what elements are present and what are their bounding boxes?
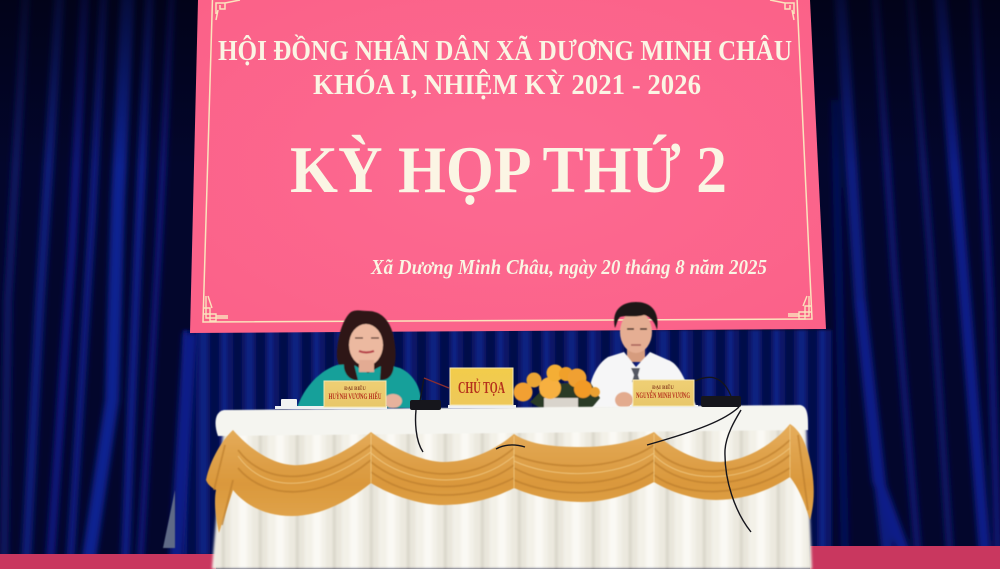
lower backdrop curtain band: [183, 330, 833, 555]
face: [620, 311, 652, 353]
shirt: [587, 352, 697, 408]
nameplate: Nguyen Minh Vuong: ĐẠI BIỂU: [652, 385, 674, 391]
nameplate: chairperson: CHỦ TỌA: [458, 378, 505, 397]
corner ornament: top right: [770, 0, 794, 20]
table top: [216, 405, 808, 436]
corner ornament: bottom left: [203, 296, 228, 321]
corner ornament: bottom right: [788, 296, 812, 319]
delegate: man in white shirt: [587, 302, 697, 408]
delegate: woman in teal: [297, 310, 421, 408]
nameplate: Nguyen Minh Vuong: [633, 380, 694, 406]
left curtain folds: [4, 0, 190, 565]
projection screen: [190, 0, 826, 333]
screen border: [203, 0, 812, 322]
nameplate: chairperson: [450, 368, 513, 405]
floor carpet: [0, 546, 1000, 569]
face: [349, 324, 383, 366]
left microphone base: [410, 400, 441, 410]
heading line 2: KHÓA I, NHIỆM KỲ 2021 - 2026: [313, 68, 701, 101]
hands: [384, 394, 402, 408]
table skirt with pleats: [212, 405, 812, 569]
swag folds: [214, 435, 808, 525]
nameplate: Huynh Vuong Hieu: ĐẠI BIỂU: [344, 386, 366, 392]
right curtain folds: [835, 0, 998, 555]
nameplate: Huynh Vuong Hieu: HUỲNH VƯƠNG HIẾU: [328, 391, 382, 401]
papers on table: [275, 405, 698, 409]
neck: [627, 348, 645, 362]
corner ornament: top left: [216, 0, 240, 20]
table cables: [416, 410, 423, 452]
nameplate: Nguyen Minh Vuong: NGUYỄN MINH VƯƠNG: [636, 390, 690, 400]
hair over blouse: [344, 358, 394, 380]
orange swag drape: [206, 424, 814, 533]
right microphone base: [701, 396, 741, 407]
microphones and cables: [410, 377, 751, 532]
flower arrangement: [514, 364, 600, 432]
hair: [337, 310, 396, 381]
tie: [631, 368, 640, 382]
orange blooms: [514, 364, 600, 402]
heading line 1: HỘI ĐỒNG NHÂN DÂN XÃ DƯƠNG MINH CHÂU: [218, 33, 792, 67]
screen text block: [218, 33, 792, 279]
vase: [544, 398, 578, 410]
leaves: [530, 382, 600, 410]
hair: [614, 302, 658, 330]
stage wall gap: [163, 490, 175, 548]
nameplate: Huynh Vuong Hieu: [324, 381, 386, 407]
paper cup: [281, 399, 297, 408]
teal blouse: [297, 364, 421, 408]
session title: KỲ HỌP THỨ 2: [290, 133, 727, 207]
place and date: Xã Dương Minh Châu, ngày 20 tháng 8 năm 2025: [370, 255, 767, 279]
hand: [615, 392, 633, 408]
